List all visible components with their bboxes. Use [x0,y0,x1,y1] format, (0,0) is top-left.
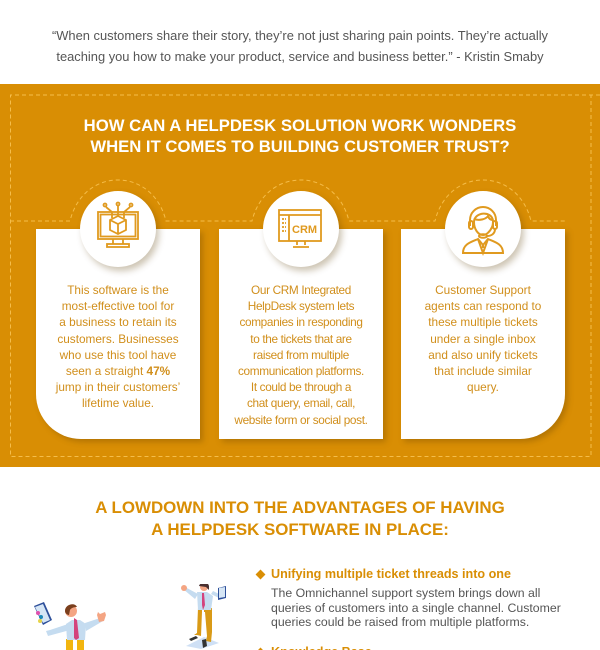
card text: It could be through a [251,380,351,394]
quote: “When customers share their story, they’re not just sharing pain points. They’re actually [52,28,548,43]
heading: WHEN IT COMES TO BUILDING CUSTOMER TRUST? [90,136,510,156]
illustration: standing man [181,584,226,649]
card text: chat query, email, call, [247,396,355,410]
icon: support agent [445,191,521,267]
card text: most-effective tool for [62,299,174,313]
card text: HelpDesk system lets [248,299,354,313]
card text: seen a straight 47% [66,364,170,378]
card text: website form or social post. [234,413,368,427]
card text: who use this tool have [60,348,176,362]
bullet: unifying threads [256,567,561,629]
card: software [36,229,200,439]
heading: HOW CAN A HELPDESK SOLUTION WORK WONDERS [84,116,516,135]
diamond icon [256,570,265,579]
card text: communication platforms. [238,364,364,378]
card text: to the tickets that are [250,332,352,346]
bullet heading: Unifying multiple ticket threads into one [271,567,511,581]
bullet text [271,586,561,629]
quote: teaching you how to make your product, service and business better.” - Kristin Smaby [56,48,544,64]
icon: CRM screen: CRM [292,224,317,236]
card text: companies in responding [239,315,363,329]
diamond icon [256,648,265,650]
bullet text: The Omnichannel support system brings down all [271,586,540,600]
card: CRM [219,229,383,439]
card text: a business to retain its [59,315,177,329]
card text: jump in their customers’ [56,380,180,394]
heading [84,116,516,156]
card text [55,283,180,410]
card text: these multiple tickets [428,315,538,329]
bullet text: queries could be raised from multiple platforms. [271,615,529,629]
card text: Our CRM Integrated [251,283,351,297]
card text: customers. Businesses [57,332,179,346]
heading: advantages [95,498,505,539]
card: agents [401,229,565,439]
card text: This software is the [67,283,169,297]
card text: that include similar [434,364,532,378]
card text: under a single inbox [430,332,536,346]
card text: agents can respond to [425,299,541,313]
panel: helpdesk trust [0,84,600,467]
card text: raised from multiple [253,348,349,362]
icon: CRM screen [263,191,339,267]
card text [234,283,368,427]
heading: advantages: A HELPDESK SOFTWARE IN PLACE: [151,520,449,539]
card text: Customer Support [435,283,531,297]
icon: monitor with cube [80,191,156,267]
bullet text: queries of customers into a single channel. Customer [271,601,561,615]
card text: query. [467,380,499,394]
card text: and also unify tickets [428,348,538,362]
card text [425,283,541,394]
bullet: knowledge base [258,645,372,650]
illustration: man with tablet [34,602,106,650]
quote [52,28,548,64]
heading: advantages: A LOWDOWN INTO THE ADVANTAGES OF HAVING [95,498,505,517]
card text: lifetime value. [82,396,154,410]
